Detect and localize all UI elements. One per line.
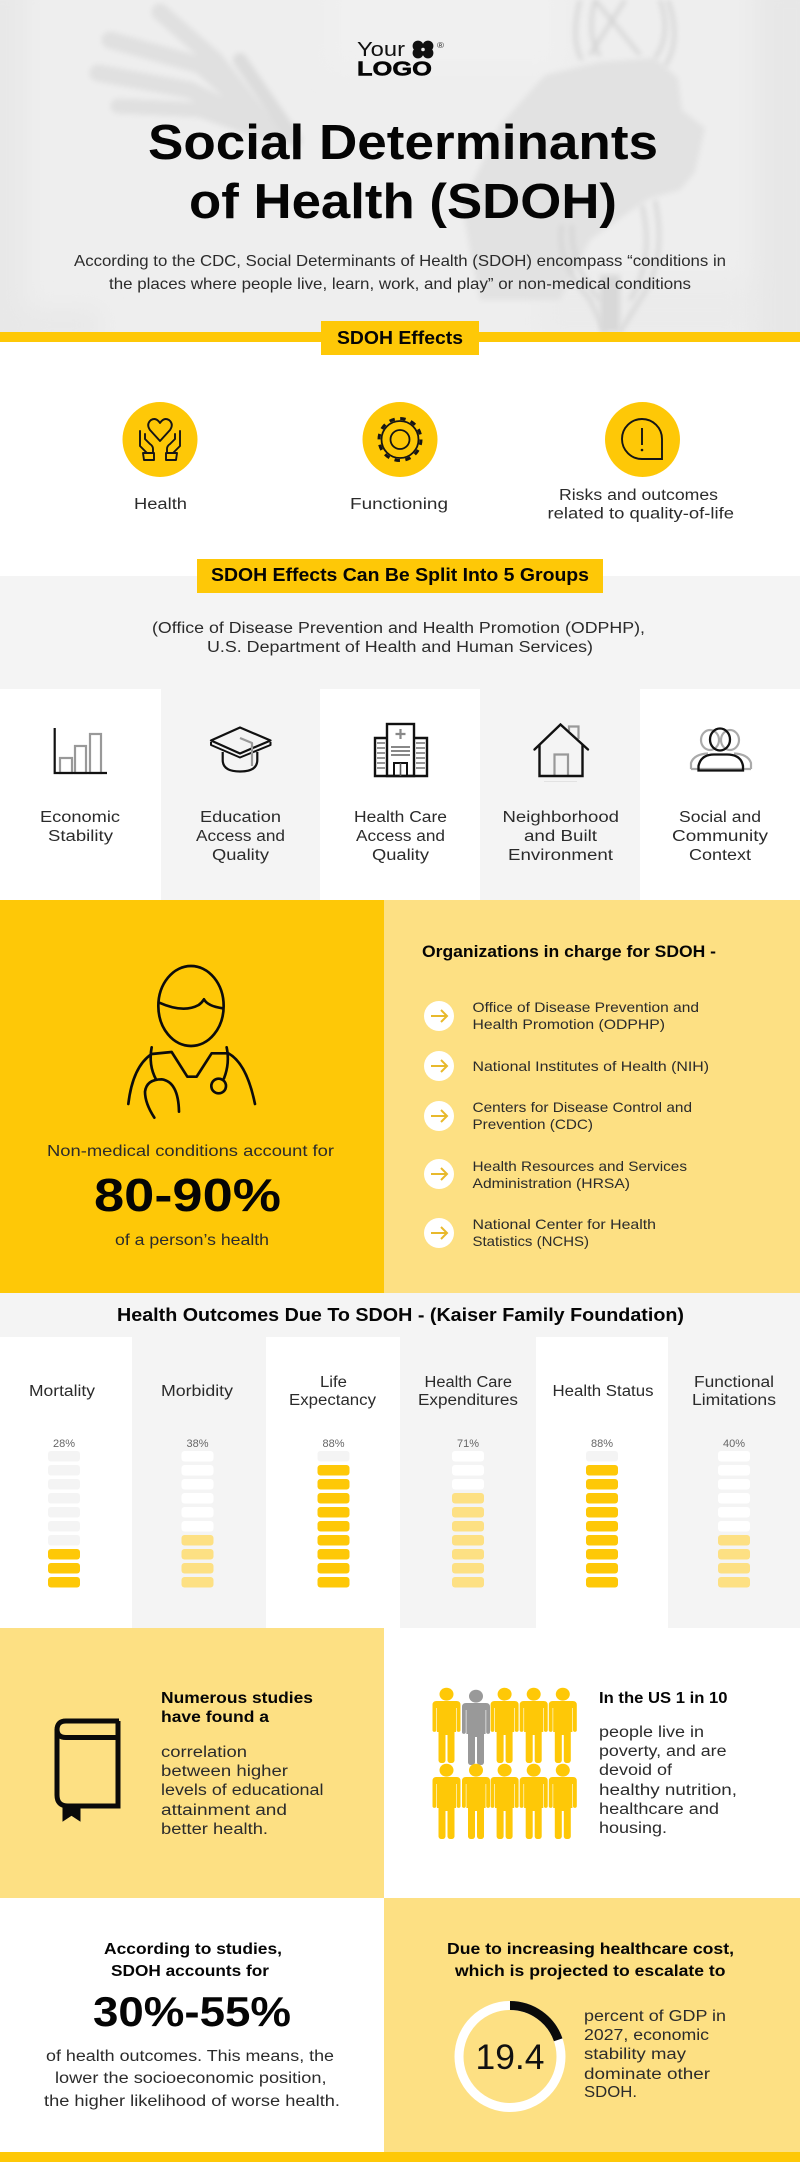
icon: alert bubble: [605, 402, 680, 477]
icon: doctor: [128, 966, 255, 1118]
panel: GDP projection: SDOH.: [584, 2084, 637, 2101]
group labels: Neighborhood: [502, 809, 619, 826]
group labels: Stability: [48, 828, 113, 845]
panel: GDP projection: Due to increasing healthcare cost,: [447, 1941, 734, 1958]
column labels: Life: [320, 1374, 347, 1391]
percent values: 38%: [186, 1438, 209, 1450]
column labels: Functional: [694, 1374, 774, 1391]
title: [148, 116, 658, 229]
chart: functional limitations 40%: [718, 1451, 750, 1588]
panel: SDOH accounts for: According to studies,: [104, 1941, 282, 1958]
percent values: 88%: [322, 1438, 345, 1450]
pictogram: 1 in 10 people: [432, 1688, 577, 1839]
list item: CDC: [424, 1099, 692, 1132]
panel: SDOH accounts for: 30%-55%: [93, 1988, 291, 2035]
panel: education correlation: have found a: [161, 1709, 269, 1726]
chart: health status 88%: [586, 1451, 618, 1588]
heading badge: 5 groups: [197, 559, 603, 593]
group labels: Health Care: [354, 809, 447, 826]
column backgrounds: [0, 689, 800, 900]
group labels: Access and: [356, 828, 445, 845]
panel: education correlation: between higher: [161, 1763, 288, 1780]
group labels: Quality: [372, 847, 429, 864]
group labels: Education: [200, 809, 281, 826]
intro text: [74, 253, 726, 293]
group labels: Quality: [212, 847, 269, 864]
panel: GDP projection: 2027, economic: [584, 2027, 709, 2044]
group labels: Economic: [40, 809, 120, 826]
panel: poverty 1 in 10: [432, 1688, 737, 1839]
icon: graduation cap: [211, 728, 270, 772]
source note: [152, 620, 645, 656]
icon: hospital: [375, 724, 427, 776]
panel: 5 groups: [0, 576, 800, 900]
panel: SDOH accounts for: lower the socioeconomic position,: [55, 2070, 326, 2087]
heading badge: 5 groups: SDOH Effects Can Be Split Into 5 Groups: [211, 565, 589, 585]
list item: NCHS: [424, 1216, 656, 1249]
chart: morbidity 38%: [182, 1451, 214, 1588]
list item: ODPHP: [424, 999, 699, 1032]
panel: education correlation: attainment and: [161, 1802, 287, 1819]
list item: HRSA: Administration (HRSA): [472, 1175, 630, 1191]
logo: ®: [437, 41, 444, 50]
panel: education correlation: Numerous studies: [161, 1690, 313, 1707]
panel: SDOH effects icons: Functioning: [350, 496, 448, 513]
panel: SDOH effects icons: Risks and outcomes: [559, 487, 718, 504]
percent values: 28%: [53, 1438, 75, 1450]
logo: Your: [357, 39, 405, 61]
panel: poverty 1 in 10: people live in: [599, 1724, 704, 1741]
heading: Health Outcomes Due To SDOH - (Kaiser Family Foundation): [117, 1305, 684, 1325]
heading badge: SDOH Effects: SDOH Effects: [337, 328, 463, 348]
logo: LOGO: [357, 58, 432, 80]
column labels: Health Care: [424, 1374, 512, 1391]
panel: education correlation: levels of educational: [161, 1782, 324, 1799]
panel: poverty 1 in 10: In the US 1 in 10: [599, 1690, 728, 1707]
list item: ODPHP: Office of Disease Prevention and: [472, 999, 699, 1015]
panel: organizations: [384, 900, 800, 1293]
panel: GDP projection: stability may: [584, 2046, 686, 2063]
yellow divider band: [0, 332, 800, 342]
column labels: Health Status: [552, 1383, 654, 1400]
column labels: Expenditures: [418, 1392, 518, 1409]
heading badge: SDOH Effects: [321, 321, 479, 355]
list item: CDC: Prevention (CDC): [472, 1116, 593, 1132]
panel: poverty 1 in 10: housing.: [599, 1820, 667, 1837]
source note: U.S. Department of Health and Human Services): [207, 639, 593, 656]
group labels: and Built: [524, 828, 598, 845]
source note: (Office of Disease Prevention and Health Promotion (ODPHP),: [152, 620, 645, 637]
column labels: Morbidity: [161, 1383, 233, 1400]
group labels: Context: [689, 847, 752, 864]
percent values: 88%: [591, 1438, 613, 1450]
panel: SDOH effects icons: related to quality-of-life: [548, 506, 734, 522]
panel: non-medical conditions stat: Non-medical conditions account for: [47, 1143, 335, 1160]
panel: SDOH accounts for: of health outcomes. This means, the: [46, 2048, 334, 2065]
panel: poverty 1 in 10: healthcare and: [599, 1801, 719, 1818]
panel: education correlation: correlation: [161, 1744, 247, 1761]
panel: poverty 1 in 10: healthy nutrition,: [599, 1782, 737, 1799]
group labels: Community: [672, 828, 768, 845]
panel: GDP projection: dominate other: [584, 2066, 710, 2083]
icon: gear: [362, 402, 438, 477]
title: Social Determinants: [148, 116, 658, 170]
panel: non-medical conditions stat: [0, 900, 384, 1293]
icon: heart in hands: [122, 402, 198, 477]
group labels: [40, 809, 768, 864]
logo: [357, 39, 444, 80]
list item: HRSA: [424, 1158, 687, 1191]
list item: HRSA: Health Resources and Services: [472, 1158, 687, 1174]
column labels: [29, 1374, 776, 1409]
icon: logo flower: [413, 41, 433, 58]
list item: NIH: National Institutes of Health (NIH): [472, 1058, 709, 1074]
icon: people: [691, 728, 751, 770]
panel: GDP projection: percent of GDP in: [584, 2008, 726, 2025]
panel: poverty 1 in 10: poverty, and are: [599, 1743, 726, 1760]
column labels: Expectancy: [289, 1392, 376, 1409]
panel: GDP projection: [384, 1898, 800, 2152]
donut chart: 19.4: 19.4: [476, 2038, 544, 2077]
icon: house: [534, 724, 588, 782]
panel: education correlation: better health.: [161, 1821, 268, 1838]
panel: non-medical conditions stat: of a person’s health: [115, 1232, 269, 1249]
intro text: According to the CDC, Social Determinants of Health (SDOH) encompass “conditions in: [74, 253, 726, 270]
percent values: 71%: [457, 1438, 479, 1450]
percent values: [53, 1438, 745, 1450]
panel: SDOH accounts for: the higher likelihood of worse health.: [44, 2093, 340, 2110]
icon: bar chart: [55, 728, 107, 773]
panel: non-medical conditions stat: 80-90%: [94, 1169, 281, 1221]
panel: SDOH accounts for: SDOH accounts for: [111, 1963, 269, 1980]
panel: SDOH effects icons: Health: [134, 496, 187, 513]
panel: GDP projection: which is projected to escalate to: [454, 1963, 726, 1980]
list item: NCHS: Statistics (NCHS): [472, 1233, 589, 1249]
panel: SDOH effects icons: [122, 402, 734, 522]
list item: NCHS: National Center for Health: [472, 1216, 656, 1232]
icon: book: [57, 1721, 119, 1819]
group labels: Social and: [679, 809, 761, 826]
column labels: Mortality: [29, 1383, 95, 1400]
chart: life expectancy 88%: [318, 1451, 350, 1588]
intro text: the places where people live, learn, work, and play” or non-medical conditions: [109, 276, 691, 293]
panel: SDOH accounts for: [0, 1898, 384, 2152]
panel: poverty 1 in 10: devoid of: [599, 1762, 673, 1779]
percent values: 40%: [723, 1438, 745, 1450]
group labels: Access and: [196, 828, 285, 845]
panel: organizations: Organizations in charge for SDOH -: [422, 943, 716, 961]
title: of Health (SDOH): [189, 175, 617, 229]
chart: mortality 28%: [48, 1451, 80, 1588]
column labels: Limitations: [692, 1392, 776, 1409]
list item: NIH: [424, 1051, 709, 1081]
footer band: [0, 2152, 800, 2162]
hero: blurred doctor photo background: [0, 0, 800, 360]
panel: health outcomes: [0, 1293, 800, 1628]
list item: ODPHP: Health Promotion (ODPHP): [472, 1016, 665, 1032]
donut chart: 19.4: [459, 2006, 561, 2108]
list item: CDC: Centers for Disease Control and: [472, 1099, 692, 1115]
chart: health care expenditures 71%: [452, 1451, 484, 1588]
panel: education correlation: [0, 1628, 384, 1898]
group labels: Environment: [508, 847, 614, 864]
white columns: [0, 1337, 668, 1628]
